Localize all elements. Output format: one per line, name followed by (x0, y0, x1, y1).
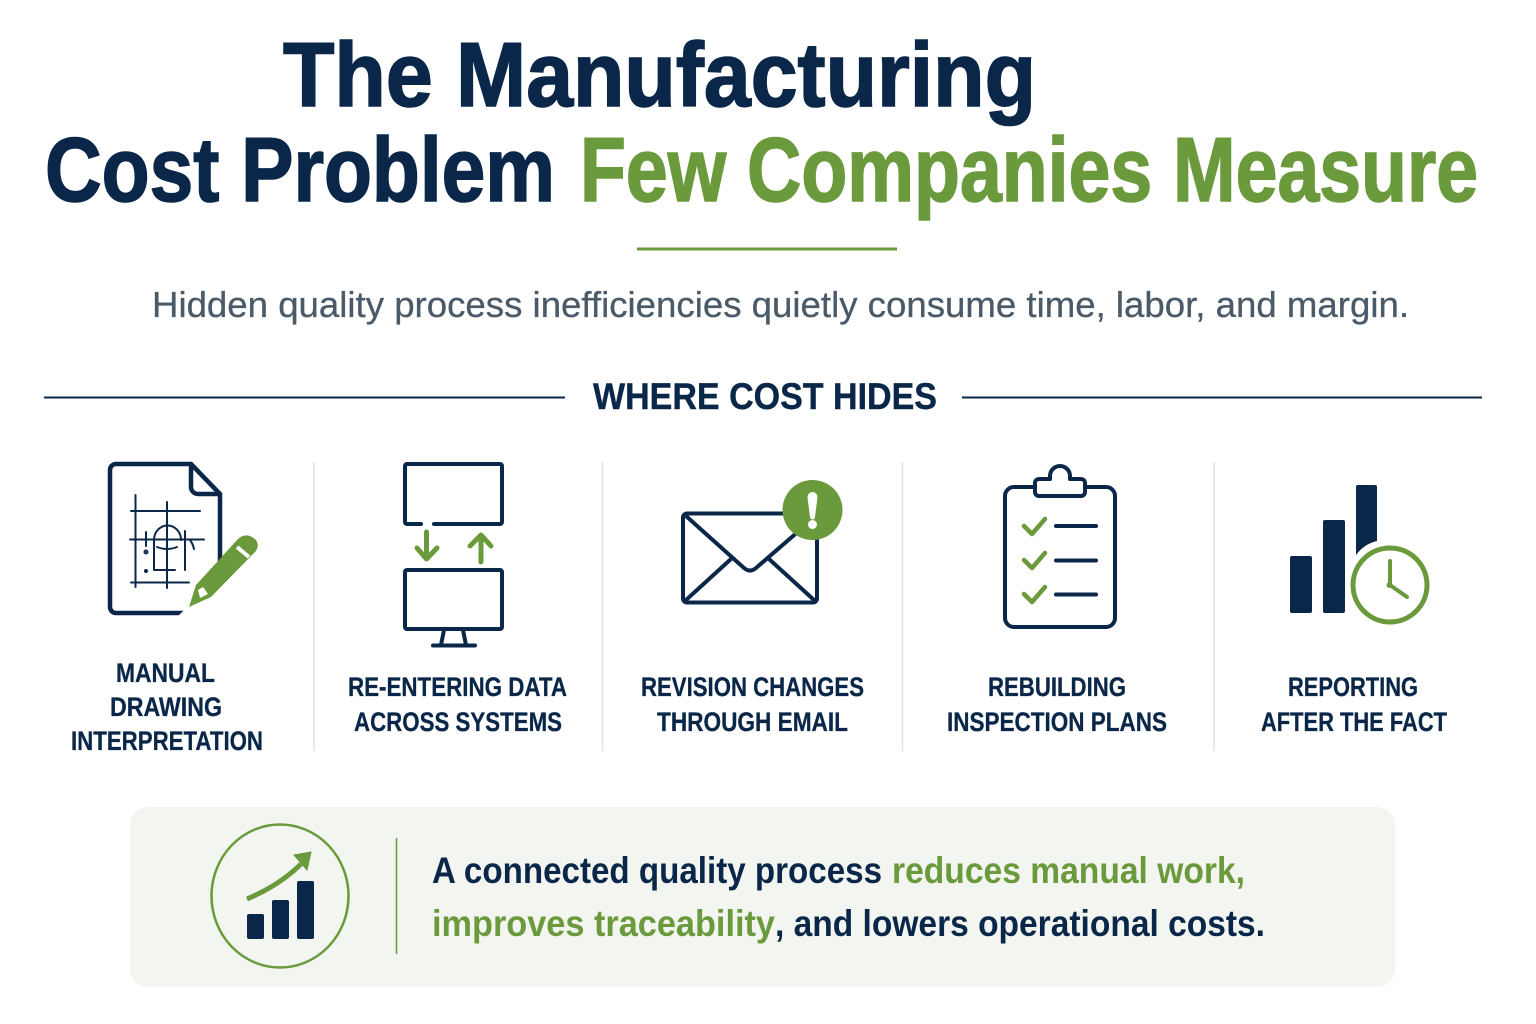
item: re-entering data across systems (348, 464, 567, 737)
title (45, 25, 1478, 221)
takeaway text (432, 850, 1265, 944)
title: The Manufacturing (283, 25, 1036, 126)
takeaway text: improves traceability (432, 903, 775, 944)
label: REPORTING (1288, 672, 1418, 702)
section heading: where cost hides: WHERE COST HIDES (593, 376, 937, 417)
icon: drawing document with pencil (110, 464, 272, 620)
label (947, 672, 1167, 737)
label: INTERPRETATION (71, 726, 263, 756)
label (641, 672, 864, 737)
item: reporting after the fact (1261, 485, 1447, 737)
icon: growth chart in circle (212, 824, 348, 968)
takeaway text: , and lowers operational costs. (775, 903, 1265, 944)
item: manual drawing interpretation (71, 464, 272, 756)
item: rebuilding inspection plans (947, 466, 1167, 737)
label: REVISION CHANGES (641, 672, 864, 702)
icon: two monitors with transfer arrows (405, 464, 502, 646)
label: MANUAL (116, 658, 215, 688)
label: DRAWING (110, 692, 222, 722)
item: revision changes through email (641, 480, 864, 737)
label: REBUILDING (988, 672, 1126, 702)
icon: clipboard checklist (1005, 466, 1115, 627)
label: THROUGH EMAIL (657, 707, 848, 737)
label (71, 658, 263, 756)
takeaway text: A connected quality process (432, 850, 882, 891)
label: INSPECTION PLANS (947, 707, 1167, 737)
icon: envelope with alert badge (683, 480, 842, 602)
subtitle: Hidden quality process inefficiencies quietly consume time, labor, and margin. (152, 284, 1409, 325)
panel: takeaway (130, 807, 1395, 987)
icon: bar chart with clock (1290, 485, 1427, 622)
label: ACROSS SYSTEMS (354, 707, 562, 737)
label: AFTER THE FACT (1261, 707, 1447, 737)
label: RE-ENTERING DATA (348, 672, 567, 702)
title: Cost Problem (45, 120, 555, 221)
label (1261, 672, 1447, 737)
label (348, 672, 567, 737)
takeaway text: reduces manual work, (892, 850, 1245, 891)
